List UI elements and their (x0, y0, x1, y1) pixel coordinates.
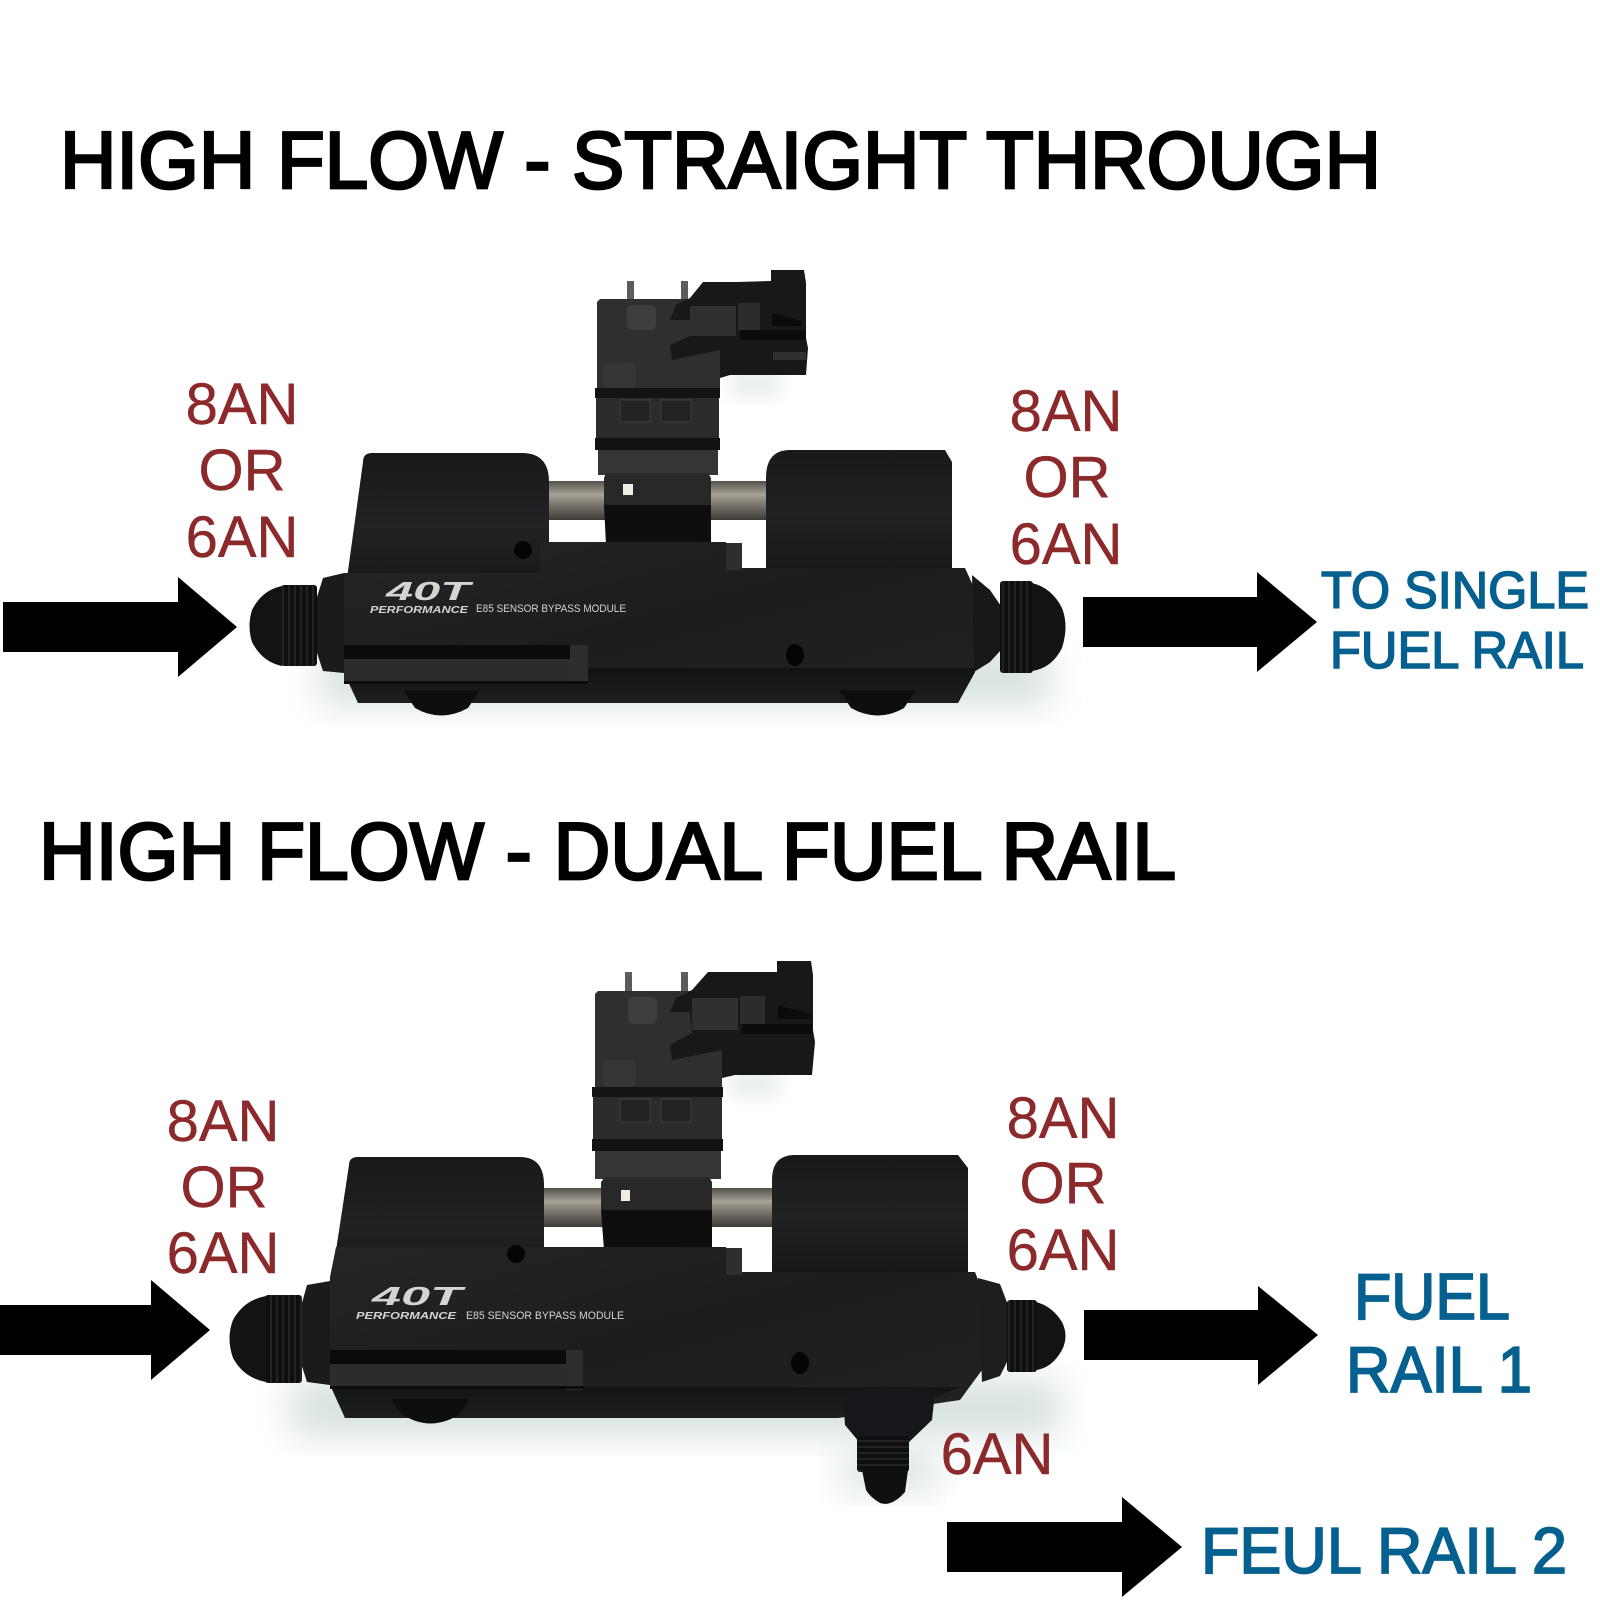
engraved logo: 40T (384, 576, 474, 606)
side slot (330, 1350, 583, 1390)
sensor hub (601, 1177, 712, 1250)
stainless tube (544, 481, 770, 520)
soft shadow under module (320, 372, 1050, 705)
lower body face (330, 1380, 960, 1418)
label: right port size (1007, 1086, 1119, 1283)
sensor connector (595, 270, 808, 475)
label: right port size: 6AN (1010, 512, 1122, 577)
engraved logo (356, 1281, 624, 1322)
right outlet fitting (1007, 1300, 1066, 1372)
step detail (726, 543, 742, 570)
left hex nut (300, 1281, 330, 1385)
right outlet fitting (1000, 581, 1066, 673)
engraved logo: PERFORMANCE (370, 605, 468, 616)
bottom plug (390, 1399, 470, 1424)
right hex nut (972, 575, 1001, 672)
title: high flow straight through: HIGH FLOW - STRAIGHT THROUGH (60, 116, 1381, 206)
soft shadow under module (290, 1072, 1060, 1490)
label: right port size: OR (1024, 445, 1110, 510)
left hex nut (316, 573, 344, 673)
label: right port size: 8AN (1010, 379, 1122, 444)
arrow: outlet fuel rail 2 (947, 1497, 1182, 1597)
label: lower port size: 6AN (941, 1422, 1053, 1487)
engraved logo: 40T (370, 1281, 466, 1311)
arrow: outlet straight through (1083, 572, 1317, 672)
left housing block (330, 1157, 544, 1290)
right hex nut (978, 1278, 1008, 1382)
screw holes (507, 1245, 809, 1374)
label: right port size: 6AN (1007, 1218, 1119, 1283)
label: left port size: OR (198, 438, 286, 503)
label: fuel rail 1: RAIL 1 (1346, 1333, 1532, 1406)
sensor hub (604, 473, 711, 545)
bottom plugs (403, 690, 916, 716)
left inlet fitting (250, 585, 317, 666)
label: to single fuel rail: TO SINGLE (1321, 562, 1589, 620)
arrow: inlet dual rail (0, 1280, 210, 1380)
main body (344, 542, 975, 703)
lower body face (344, 668, 975, 703)
product photo: straight-through module (250, 270, 1066, 716)
title: high flow dual fuel rail: HIGH FLOW - DUAL FUEL RAIL (39, 807, 1176, 897)
label: to single fuel rail: FUEL RAIL (1330, 622, 1584, 680)
downward 6AN fitting (843, 1388, 935, 1504)
label: left port size: OR (180, 1155, 268, 1220)
left housing block (344, 453, 549, 600)
screw holes (514, 541, 804, 666)
label: left port size: 8AN (186, 372, 298, 437)
label: right port size: OR (1020, 1151, 1106, 1216)
label: left port size: 8AN (167, 1089, 279, 1154)
label: right port size: 8AN (1007, 1086, 1119, 1151)
label: to single fuel rail (1321, 562, 1589, 680)
engraved logo: E85 SENSOR BYPASS MODULE (466, 1310, 624, 1322)
label: fuel rail 1 (1346, 1260, 1532, 1406)
arrow: inlet straight through (3, 577, 237, 677)
label: left port size (186, 372, 298, 570)
arrow: outlet fuel rail 1 (1084, 1286, 1318, 1385)
engraved logo: PERFORMANCE (356, 1311, 456, 1322)
side slot (344, 645, 588, 684)
left inlet fitting (230, 1295, 302, 1383)
label: right port size (1010, 379, 1122, 577)
right housing block (772, 1155, 968, 1275)
label: feul rail 2: FEUL RAIL 2 (1201, 1514, 1567, 1587)
label: left port size (167, 1089, 279, 1286)
product photo: dual-rail module (230, 961, 1066, 1504)
step detail (726, 1248, 742, 1275)
label: left port size: 6AN (186, 505, 298, 570)
engraved logo: E85 SENSOR BYPASS MODULE (476, 603, 626, 615)
sensor connector (592, 961, 815, 1179)
right housing block (766, 450, 952, 577)
main body (330, 1247, 982, 1418)
label: fuel rail 1: FUEL (1354, 1260, 1510, 1333)
engraved logo (370, 576, 626, 616)
label: left port size: 6AN (167, 1221, 279, 1286)
stainless tube (537, 1188, 775, 1227)
